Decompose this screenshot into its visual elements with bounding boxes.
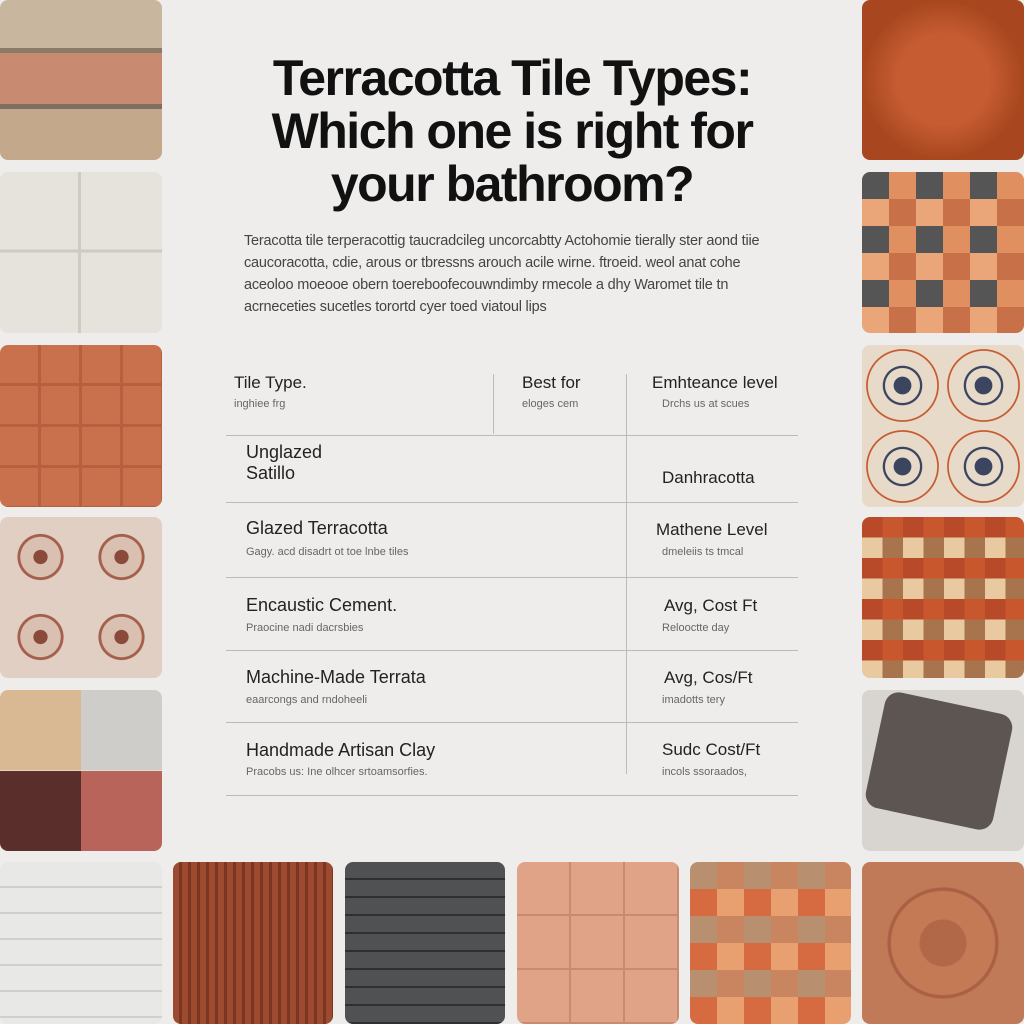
row 5: Handmade Artisan Clay xyxy=(246,740,435,760)
row 1: Unglazed xyxy=(246,442,322,462)
tile: encaustic blue xyxy=(862,345,1024,507)
tile: mixed squares xyxy=(862,172,1024,333)
table: eloges cem xyxy=(522,398,578,410)
title: your bathroom? xyxy=(331,156,693,212)
tile: mixed warm xyxy=(690,862,851,1024)
tile: square motifs xyxy=(0,690,162,851)
table: Avg, Cost Ft xyxy=(664,596,757,615)
tile: patterned clover xyxy=(0,517,162,678)
table: inghiee frg xyxy=(234,398,285,410)
tile: fluted terracotta xyxy=(173,862,333,1024)
tile: terracotta grid xyxy=(0,345,162,507)
row 1: Satillo xyxy=(246,463,295,483)
tile: white stone xyxy=(0,172,162,333)
table: incols ssoraados, xyxy=(662,766,747,778)
table: Pracobs us: Ine olhcer srtoamsorfies. xyxy=(246,766,428,778)
tile: brick xyxy=(0,0,162,160)
table: Mathene Level xyxy=(656,520,768,539)
table: Drchs us at scues xyxy=(662,398,749,410)
table: Relooctte day xyxy=(662,622,729,634)
table: dmeleiis ts tmcal xyxy=(662,546,743,558)
title: Which one is right for xyxy=(272,103,752,159)
table: Sudc Cost/Ft xyxy=(662,740,760,759)
tile: pink squares xyxy=(517,862,679,1024)
tile: grey stone xyxy=(862,690,1024,851)
header: tile type: Tile Type. xyxy=(234,373,307,392)
tile: white subway xyxy=(0,862,162,1024)
table: Gagy. acd disadrt ot toe lnbe tiles xyxy=(246,546,408,558)
intro paragraph: Teracotta tile terperacottig taucradcileg uncorcabtty Actohomie tierally ster aond tiie caucoracotta, cdie, arous or tbressns arouch acile wirne. ftroeid. weol anat cohe aceoloo moeooe obern toereboofecouwndimby rmecole a dhy Waromet tile tn acrneceties sucetles torortd cyer toed viatoul lips xyxy=(244,233,759,315)
tile: carved terracotta xyxy=(862,862,1024,1024)
tile: mosaic xyxy=(862,517,1024,678)
tile: raised terracotta xyxy=(862,0,1024,160)
table: Praocine nadi dacrsbies xyxy=(246,622,363,634)
tile: grey shower xyxy=(345,862,505,1024)
row 1 xyxy=(246,442,322,483)
row 4: Machine-Made Terrata xyxy=(246,667,426,687)
table: Danhracotta xyxy=(662,468,755,487)
title: Terracotta Tile Types: xyxy=(273,50,751,106)
table: eaarcongs and rndoheeli xyxy=(246,694,367,706)
table: imadotts tery xyxy=(662,694,725,706)
title xyxy=(272,50,754,212)
header: maintenance: Emhteance level xyxy=(652,373,778,392)
row 2: Glazed Terracotta xyxy=(246,518,388,538)
row 3: Encaustic Cement. xyxy=(246,595,397,615)
table: Avg, Cos/Ft xyxy=(664,668,752,687)
header: best for: Best for xyxy=(522,373,581,392)
